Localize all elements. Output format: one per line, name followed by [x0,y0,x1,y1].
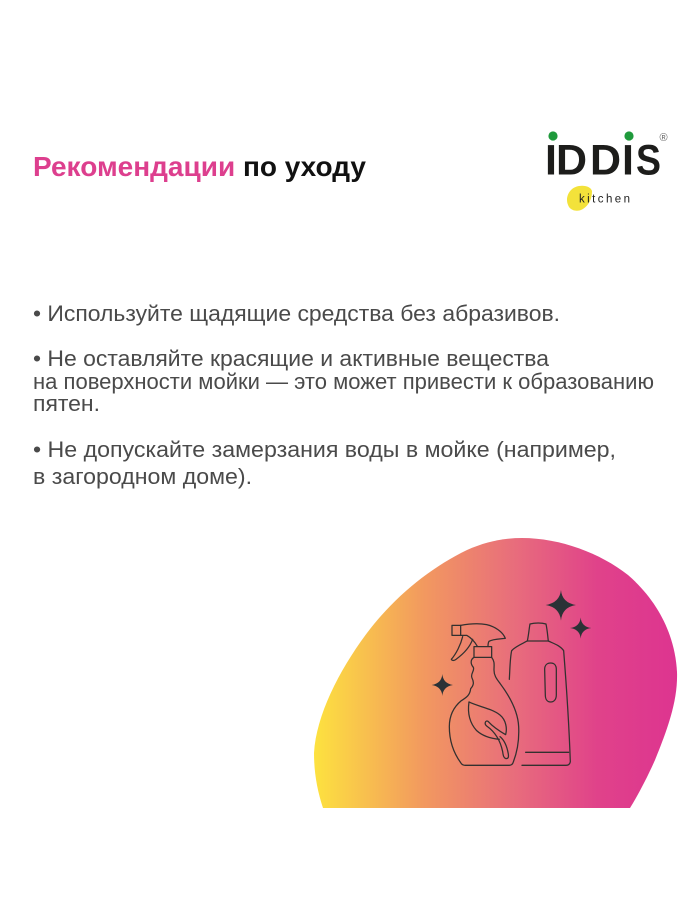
spray bottle [449,624,519,765]
logo wordmark: D [590,136,621,184]
item 3: • Не допускайте замерзания воды в мойке (например, [33,437,616,462]
logo: iddis kitchen [545,131,668,211]
item 2: пятен. [33,391,100,416]
item 3 [33,437,616,489]
logo wordmark: I [545,136,557,184]
detergent bottle [509,623,570,765]
gradient blob [314,538,677,808]
logo yellow spot [567,186,592,211]
text block: recommendations [33,301,654,489]
item 3: в загородном доме). [33,464,252,489]
logo: iddis kitchen: ® [659,132,668,144]
item 2 [33,346,654,416]
logo kitchen word: kitchen [579,194,630,206]
logo wordmark: I [622,136,634,184]
item 2: • Не оставляйте красящие и активные вещества [33,346,550,371]
logo wordmark [545,136,661,184]
logo wordmark: S [636,136,661,184]
item 1: • Используйте щадящие средства без абразивов. [33,301,560,326]
logo wordmark: D [556,136,587,184]
item 2: на поверхности мойки — это может привести к образованию [33,369,654,394]
title: Рекомендации по уходу [33,151,366,182]
icon: cleaning bottles with sparkles [432,590,591,765]
sparkles [432,590,591,696]
